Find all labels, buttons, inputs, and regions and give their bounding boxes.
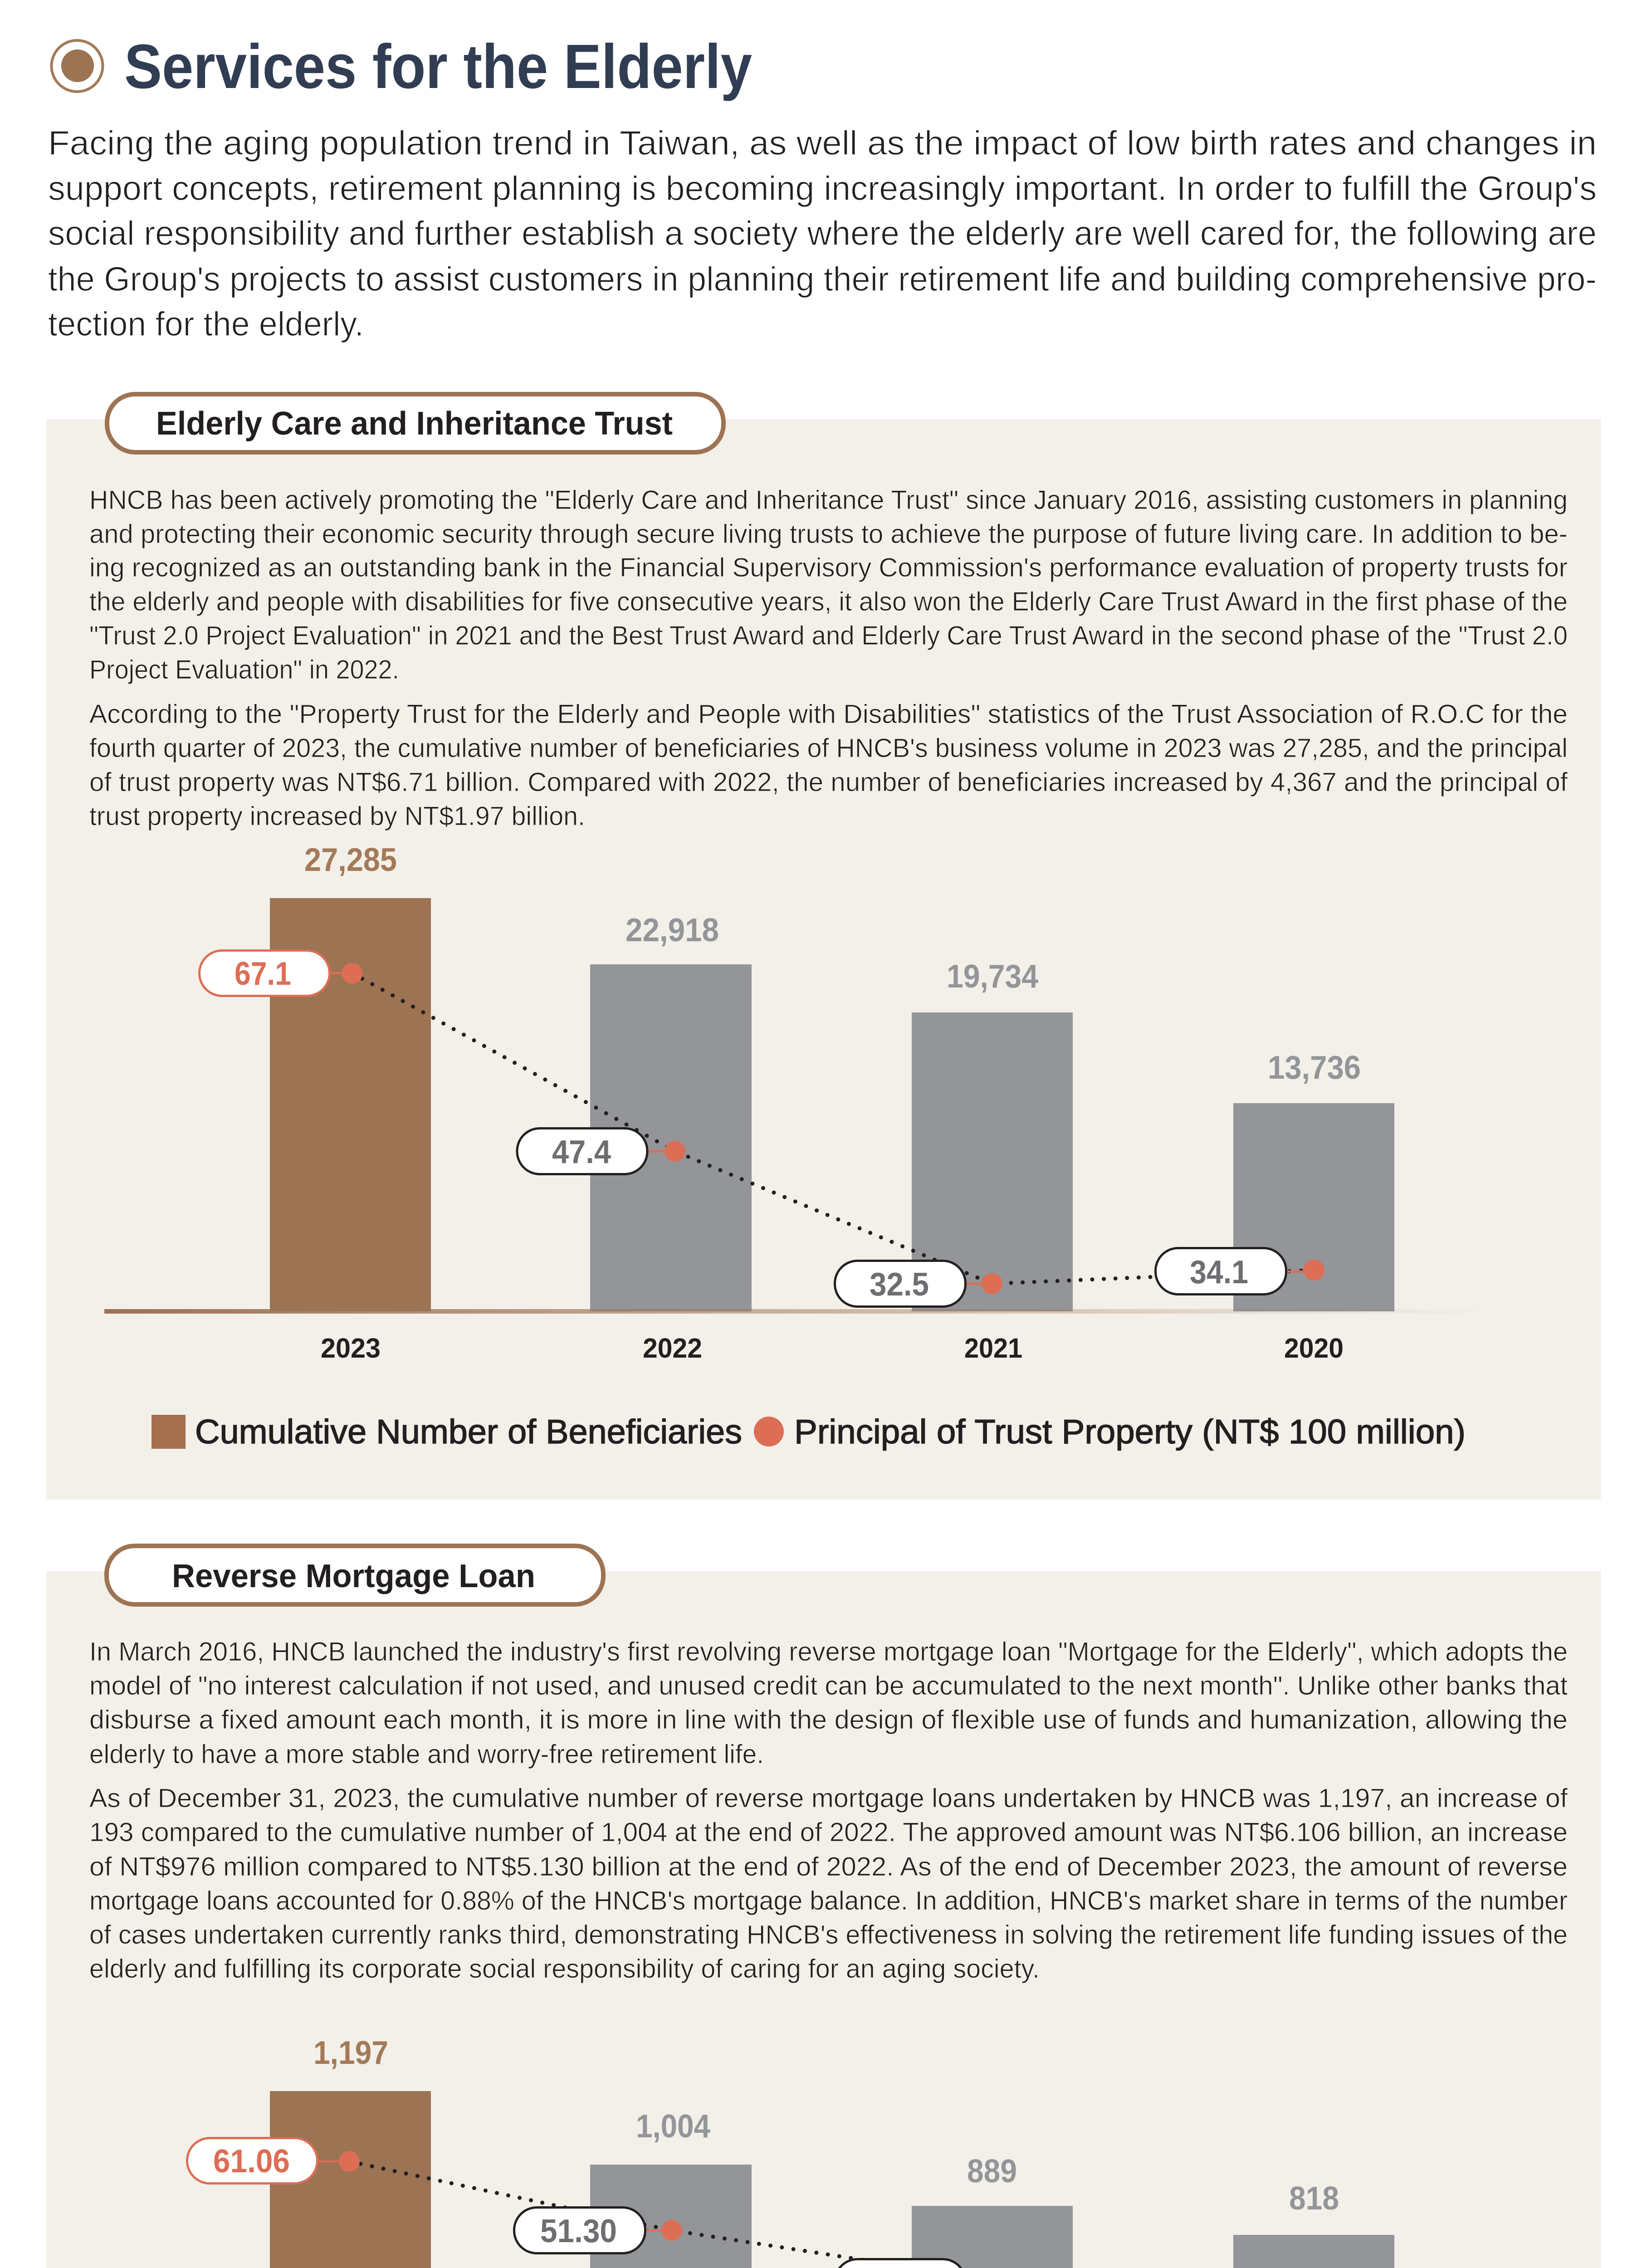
panel: Elderly Care and Inheritance Trust <box>46 394 1601 1500</box>
trust description text: and protecting their economic security through secure living trusts to achieve the purpose of future living care. In addition to be- <box>89 519 1568 549</box>
point 2023 <box>200 951 363 996</box>
bars <box>270 2091 1394 2268</box>
point 2021 <box>835 2259 1002 2268</box>
dotted trend line <box>352 973 1314 1284</box>
trust description text: According to the "Property Trust for the Elderly and People with Disabilities" statistics of the Trust Association of R.O.C for the <box>89 699 1568 729</box>
mortgage description text: model of "no interest calculation if not used, and unused credit can be accumulated to the next month". Unlike other banks that <box>89 1671 1568 1701</box>
chart: beneficiaries and trust principal <box>104 842 1490 1451</box>
icon: title bullet <box>52 40 103 92</box>
point 2023: 61.06 <box>213 2143 290 2180</box>
year labels: 2021 <box>964 1333 1022 1364</box>
bar value labels <box>304 842 1361 1086</box>
bar value labels <box>313 2035 1339 2217</box>
mortgage description text: As of December 31, 2023, the cumulative number of reverse mortgage loans undertaken by HNCB was 1,197, an increase of <box>89 1784 1568 1813</box>
mortgage description text: of NT$976 million compared to NT$5.130 billion at the end of 2022. As of the end of December 2023, the amount of reverse <box>89 1852 1568 1882</box>
year labels: 2022 <box>643 1333 702 1364</box>
intro text block <box>48 124 1597 343</box>
heading pill <box>107 1546 603 1604</box>
trust description text <box>89 485 1568 831</box>
heading pill <box>107 394 723 452</box>
bars <box>270 898 1394 1311</box>
bar value labels: 27,285 <box>304 842 397 878</box>
heading pill: Reverse Mortgage Loan <box>172 1558 535 1594</box>
trust description text: fourth quarter of 2023, the cumulative number of beneficiaries of HNCB's business volume in 2023 was 27,285, and the principal <box>89 733 1568 763</box>
legend: Principal of Trust Property (NT$ 100 million) <box>794 1413 1466 1451</box>
chart: cases undertaken and approved amount <box>104 2035 1490 2268</box>
trust description text: of trust property was NT$6.71 billion. Compared with 2022, the number of beneficiaries increased by 4,367 and the principal of <box>89 767 1568 797</box>
intro text block: tection for the elderly. <box>48 305 364 343</box>
trust description text: the elderly and people with disabilities for five consecutive years, it also won the Elderly Care Trust Award in the first phase of the <box>89 587 1568 616</box>
bar value labels: 889 <box>967 2153 1017 2190</box>
intro text block: social responsibility and further establish a society where the elderly are well cared for, the following are <box>48 214 1597 252</box>
point 2022 <box>514 2207 682 2253</box>
mortgage description text: disburse a fixed amount each month, it is more in line with the design of flexible use of funds and humanization, allowing the <box>89 1705 1568 1735</box>
legend: Cumulative Number of Beneficiaries <box>195 1413 742 1451</box>
point 2020: 34.1 <box>1190 1254 1248 1290</box>
mortgage description text: elderly and fulfilling its corporate social responsibility of caring for an aging society. <box>89 1954 1040 1984</box>
trust description text: Project Evaluation" in 2022. <box>89 655 399 684</box>
mortgage description text <box>89 1637 1568 1984</box>
panel background <box>46 1571 1601 2268</box>
trust description text: HNCB has been actively promoting the "Elderly Care and Inheritance Trust" since January 2016, assisting customers in planning <box>89 485 1568 515</box>
point 2022: 47.4 <box>552 1134 611 1170</box>
title: Services for the Elderly <box>124 32 752 102</box>
panel: Reverse Mortgage Loan <box>46 1546 1601 2268</box>
mortgage description text: of cases undertaken currently ranks third, demonstrating HNCB's effectiveness in solving the retirement life funding issues of the <box>89 1920 1568 1950</box>
mortgage description text: mortgage loans accounted for 0.88% of the HNCB's mortgage balance. In addition, HNCB's market share in terms of the number <box>89 1886 1568 1916</box>
intro text block: the Group's projects to assist customers in planning their retirement life and building comprehensive pro- <box>48 260 1597 298</box>
bar value labels: 22,918 <box>626 912 719 948</box>
bar value labels: 1,197 <box>313 2035 388 2071</box>
panel background <box>46 419 1601 1500</box>
dotted trend line <box>349 2161 1314 2268</box>
point 2022 <box>517 1129 685 1174</box>
mortgage description text: In March 2016, HNCB launched the industry's first revolving reverse mortgage loan "Mortgage for the Elderly", which adopts the <box>89 1637 1568 1667</box>
intro text block: Facing the aging population trend in Taiwan, as well as the impact of low birth rates and changes in <box>48 124 1597 162</box>
intro text block: support concepts, retirement planning is becoming increasingly important. In order to fulfill the Group's <box>48 169 1597 207</box>
trust description text: ing recognized as an outstanding bank in the Financial Supervisory Commission's performance evaluation of property trusts for <box>89 553 1568 582</box>
bar value labels: 818 <box>1289 2180 1339 2217</box>
point 2021 <box>835 1261 1002 1306</box>
point 2023 <box>187 2138 360 2184</box>
point 2021: 32.5 <box>870 1266 929 1303</box>
point 2020 <box>1156 1248 1324 1295</box>
year labels <box>321 1333 1344 1364</box>
trust description text: trust property increased by NT$1.97 billion. <box>89 802 585 831</box>
axis line <box>104 1309 1490 1314</box>
bar value labels: 1,004 <box>636 2108 710 2145</box>
heading pill: Elderly Care and Inheritance Trust <box>156 406 673 442</box>
point 2023: 67.1 <box>235 956 291 992</box>
year labels: 2023 <box>321 1333 381 1364</box>
legend <box>151 1413 1466 1451</box>
mortgage description text: elderly to have a more stable and worry-free retirement life. <box>89 1740 764 1769</box>
point 2022: 51.30 <box>540 2213 617 2249</box>
trust description text: "Trust 2.0 Project Evaluation" in 2021 and the Best Trust Award and Elderly Care Trust Award in the second phase of the "Trust 2.0 <box>89 621 1568 650</box>
bar value labels: 19,734 <box>947 958 1038 995</box>
mortgage description text: 193 compared to the cumulative number of 1,004 at the end of 2022. The approved amount was NT$6.106 billion, an increase <box>89 1818 1568 1847</box>
year labels: 2020 <box>1284 1333 1344 1364</box>
bar value labels: 13,736 <box>1268 1050 1361 1086</box>
